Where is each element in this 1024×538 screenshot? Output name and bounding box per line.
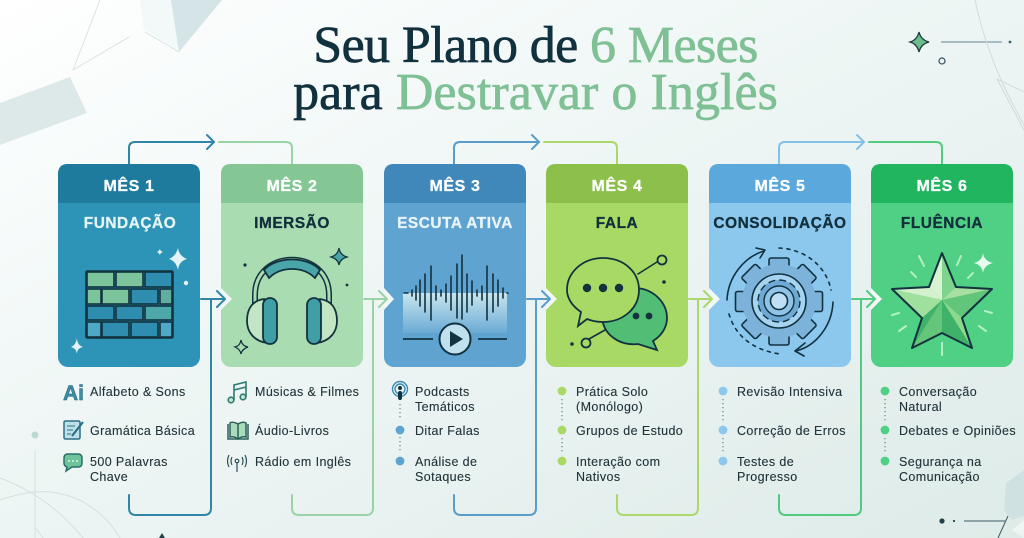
list: month 5 topics: Testes de bbox=[737, 455, 794, 469]
list: month 6 topics: Segurança na bbox=[899, 455, 982, 469]
icon: star bbox=[892, 253, 993, 355]
icon: speech bubble bbox=[64, 454, 82, 471]
panel: month 3 bbox=[384, 164, 526, 367]
list: month 4 topics: Grupos de Estudo bbox=[576, 424, 683, 438]
icon: play button bbox=[403, 324, 507, 354]
icon: notepad with pencil bbox=[64, 421, 83, 439]
panel: month 2: MÊS 2 bbox=[266, 176, 318, 195]
panel: month 3: ESCUTA ATIVA bbox=[397, 215, 513, 232]
icon: sparkles bbox=[71, 248, 188, 354]
list: month 3 topics: Análise de bbox=[415, 455, 477, 469]
list: month 6 topics bbox=[881, 385, 1016, 484]
icon: headphone sparkles bbox=[235, 248, 348, 354]
icon: chat bubbles bbox=[567, 256, 667, 350]
icon: headphones bbox=[247, 260, 337, 344]
decoration: bottom-right shapes bbox=[939, 470, 1024, 538]
list: month 1 topics: Alfabeto & Sons bbox=[90, 385, 186, 399]
list: month 1 topics: 500 Palavras bbox=[90, 455, 168, 469]
decoration: top-left shards bbox=[0, 0, 222, 145]
panel: month 1 bbox=[58, 164, 200, 367]
panel: month 6: FLUÊNCIA bbox=[901, 214, 983, 232]
flow connector: month 4 to 5 bbox=[617, 288, 720, 515]
panel: month 2: IMERSÃO bbox=[254, 214, 330, 232]
top connectors bbox=[129, 135, 942, 164]
icon: radio antenna bbox=[228, 455, 246, 472]
panel: month 2 bbox=[221, 164, 363, 367]
list: month 4 topics: Nativos bbox=[576, 470, 620, 484]
icon: brick wall bbox=[86, 271, 173, 338]
list: month 2 topics: Rádio em Inglês bbox=[255, 455, 351, 469]
list: month 5 topics: Revisão Intensiva bbox=[737, 385, 842, 399]
list: month 2 topics: Áudio-Livros bbox=[255, 423, 329, 438]
flow connector: month 5 to 6 bbox=[779, 288, 882, 515]
flow connector: month 1 to 2 bbox=[129, 288, 232, 515]
panel: month 1: FUNDAÇÃO bbox=[84, 214, 176, 232]
list: month 2 topics: Músicas & Filmes bbox=[255, 385, 359, 399]
panel: month 1: MÊS 1 bbox=[103, 176, 155, 195]
list: month 4 topics: Interação com bbox=[576, 455, 660, 469]
panel: month 4 bbox=[546, 164, 688, 367]
panel: month 5: MÊS 5 bbox=[754, 176, 806, 195]
list: month 4 topics bbox=[558, 385, 683, 484]
list: month 3 topics bbox=[392, 382, 480, 484]
list: month 6 topics: Natural bbox=[899, 400, 942, 414]
icon: music notes bbox=[228, 382, 246, 403]
list: month 3 topics: Podcasts bbox=[415, 385, 470, 399]
decoration: top-right sparkle and lines bbox=[910, 0, 1024, 130]
title: Seu Plano de 6 Meses bbox=[313, 17, 758, 74]
panel: month 3: MÊS 3 bbox=[429, 176, 481, 195]
icon: open book bbox=[228, 422, 248, 439]
list: month 3 topics: Temáticos bbox=[415, 400, 475, 414]
list: month 1 topics: Gramática Básica bbox=[90, 424, 195, 438]
list: month 6 topics: Comunicação bbox=[899, 470, 980, 484]
icon: gear with cycle arrows bbox=[727, 248, 833, 356]
panel: month 6: MÊS 6 bbox=[916, 176, 968, 195]
title: para Destravar o Inglês bbox=[293, 64, 778, 121]
list: month 3 topics: Ditar Falas bbox=[415, 424, 480, 438]
panel: month 5 bbox=[709, 164, 851, 367]
chart: audio waveform bbox=[403, 255, 508, 354]
decoration: bottom-left circles bbox=[0, 432, 165, 538]
panel: month 5: CONSOLIDAÇÃO bbox=[713, 214, 847, 232]
list: month 6 topics: Debates e Opiniões bbox=[899, 424, 1016, 438]
list: month 5 topics bbox=[719, 385, 846, 484]
panel: month 4: FALA bbox=[596, 215, 638, 232]
list: month 1 topics bbox=[63, 382, 195, 484]
list: month 6 topics: Conversação bbox=[899, 385, 977, 399]
flow connector: month 2 to 3 bbox=[292, 288, 394, 515]
list: month 5 topics: Correção de Erros bbox=[737, 424, 846, 438]
icon: podcast bbox=[392, 382, 408, 400]
list: month 1 topics: Chave bbox=[90, 470, 128, 484]
list: month 2 topics bbox=[228, 382, 359, 472]
list: month 4 topics: (Monólogo) bbox=[576, 400, 643, 414]
icon: Ai letters: Ai bbox=[63, 382, 84, 405]
list: month 3 topics: Sotaques bbox=[415, 470, 471, 484]
panel: month 4: MÊS 4 bbox=[591, 176, 643, 195]
panel: month 6 bbox=[871, 164, 1013, 367]
title bbox=[293, 17, 778, 121]
list: month 4 topics: Prática Solo bbox=[576, 385, 648, 399]
flow connector: month 3 to 4 bbox=[454, 288, 557, 515]
list: month 5 topics: Progresso bbox=[737, 470, 798, 484]
